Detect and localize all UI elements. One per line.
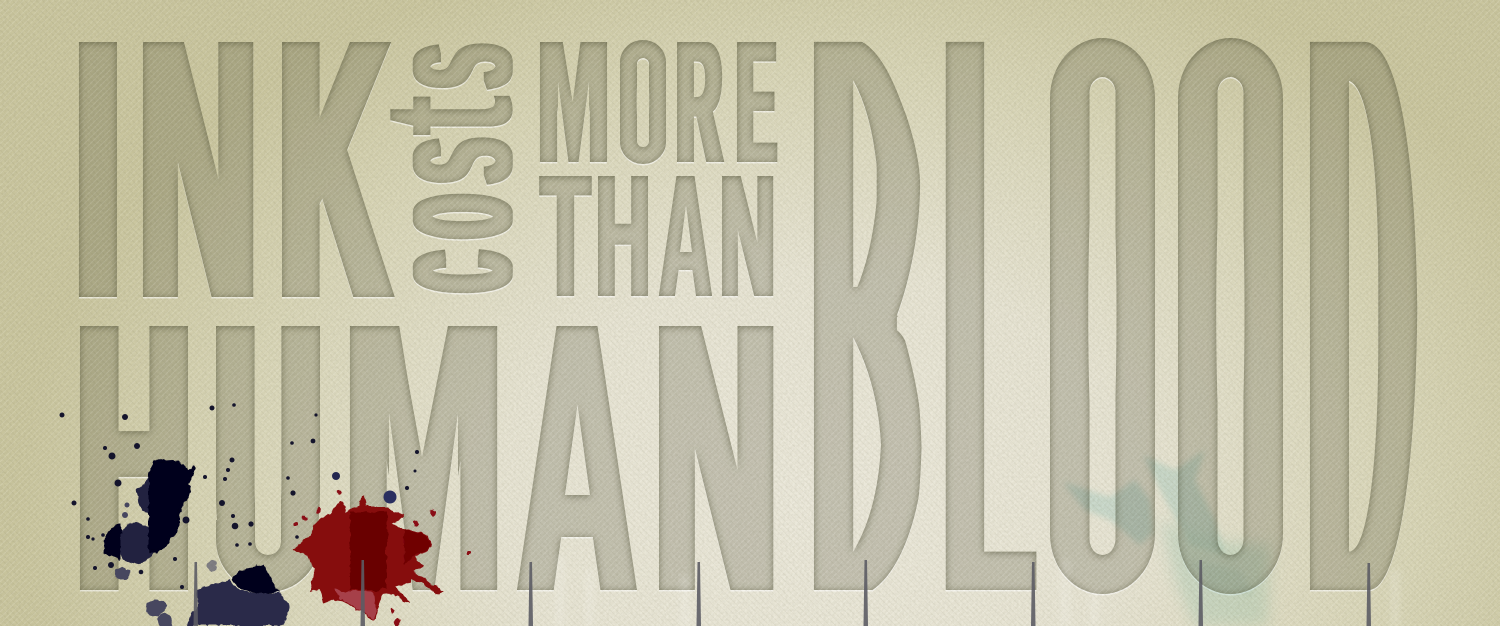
word: THAN: N [720,138,775,334]
teal ink wash stain [1063,450,1270,626]
faint vertical drip streaks [555,556,1400,626]
darker area over the letter stem [350,512,387,590]
red blood splatter [291,490,472,625]
word: MORE [540,40,778,166]
navy ink splatter [60,403,419,626]
word: costs (rotated) [343,44,551,292]
word: THAN: H [596,140,650,334]
word: costs (rotated): s [346,138,550,184]
word: THAN: A [660,140,711,334]
word: costs (rotated): c [347,251,550,292]
ink specks [60,403,419,589]
row of needles [194,560,1371,626]
word: THAN: T [541,138,590,333]
word: INK [61,0,388,376]
upper and lower ink blobs [106,460,290,626]
word: HUMAN [78,242,778,626]
main blood blob [293,498,443,620]
word: BLOOD [814,38,1418,596]
word: THAN [539,176,774,298]
word: MORE: M [537,5,610,200]
blood droplets [291,490,472,625]
word: costs (rotated): s [346,44,550,88]
word: costs (rotated): t [343,94,551,136]
word: costs (rotated): o [347,195,551,238]
word: MORE: E [737,4,776,200]
lighter wash at lower edge [333,590,376,620]
pressed headline [78,38,1418,596]
word: MORE: R [677,5,722,199]
